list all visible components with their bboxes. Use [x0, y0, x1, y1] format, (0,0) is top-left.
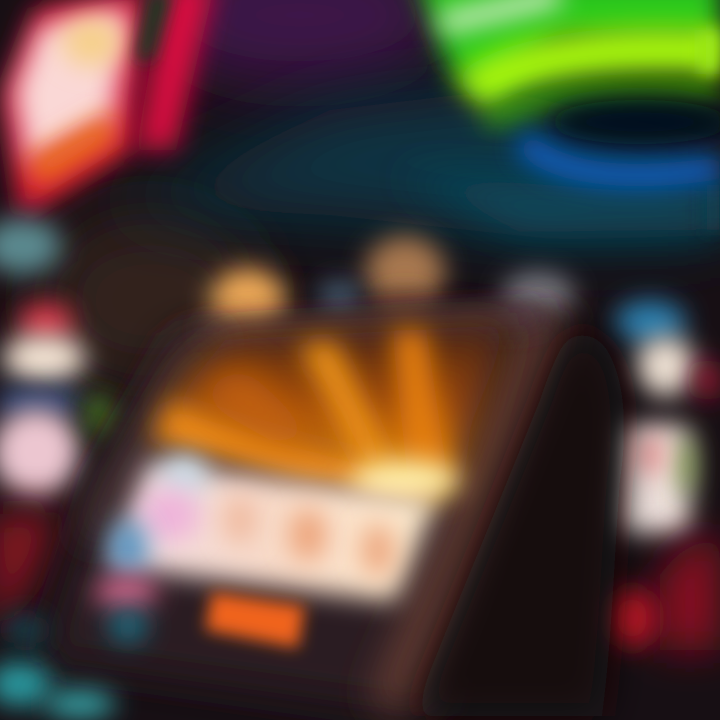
slot machine body — [40, 305, 572, 716]
bulbs above machine — [210, 236, 574, 336]
top left sign: red and white panel — [2, 0, 216, 220]
left wall glow — [0, 218, 62, 274]
machine right frame — [370, 315, 572, 716]
machine top frame — [200, 305, 545, 345]
right slot machines — [614, 300, 720, 533]
reels screen — [94, 454, 438, 642]
right red seat — [608, 536, 720, 650]
ray beams — [298, 340, 398, 475]
neon green arc — [416, 0, 720, 122]
left slot machines — [0, 302, 114, 625]
dark green strip — [136, 0, 172, 60]
machine left frame — [80, 330, 222, 540]
dark oval under green arc — [548, 100, 720, 144]
teal ceiling band — [110, 90, 720, 240]
neon blue arc — [522, 140, 720, 175]
orange button — [205, 592, 305, 648]
bottom left teal lights — [0, 616, 116, 718]
glowing orange rays panel — [150, 325, 510, 500]
red strip — [136, 0, 216, 150]
person silhouette — [412, 325, 624, 716]
